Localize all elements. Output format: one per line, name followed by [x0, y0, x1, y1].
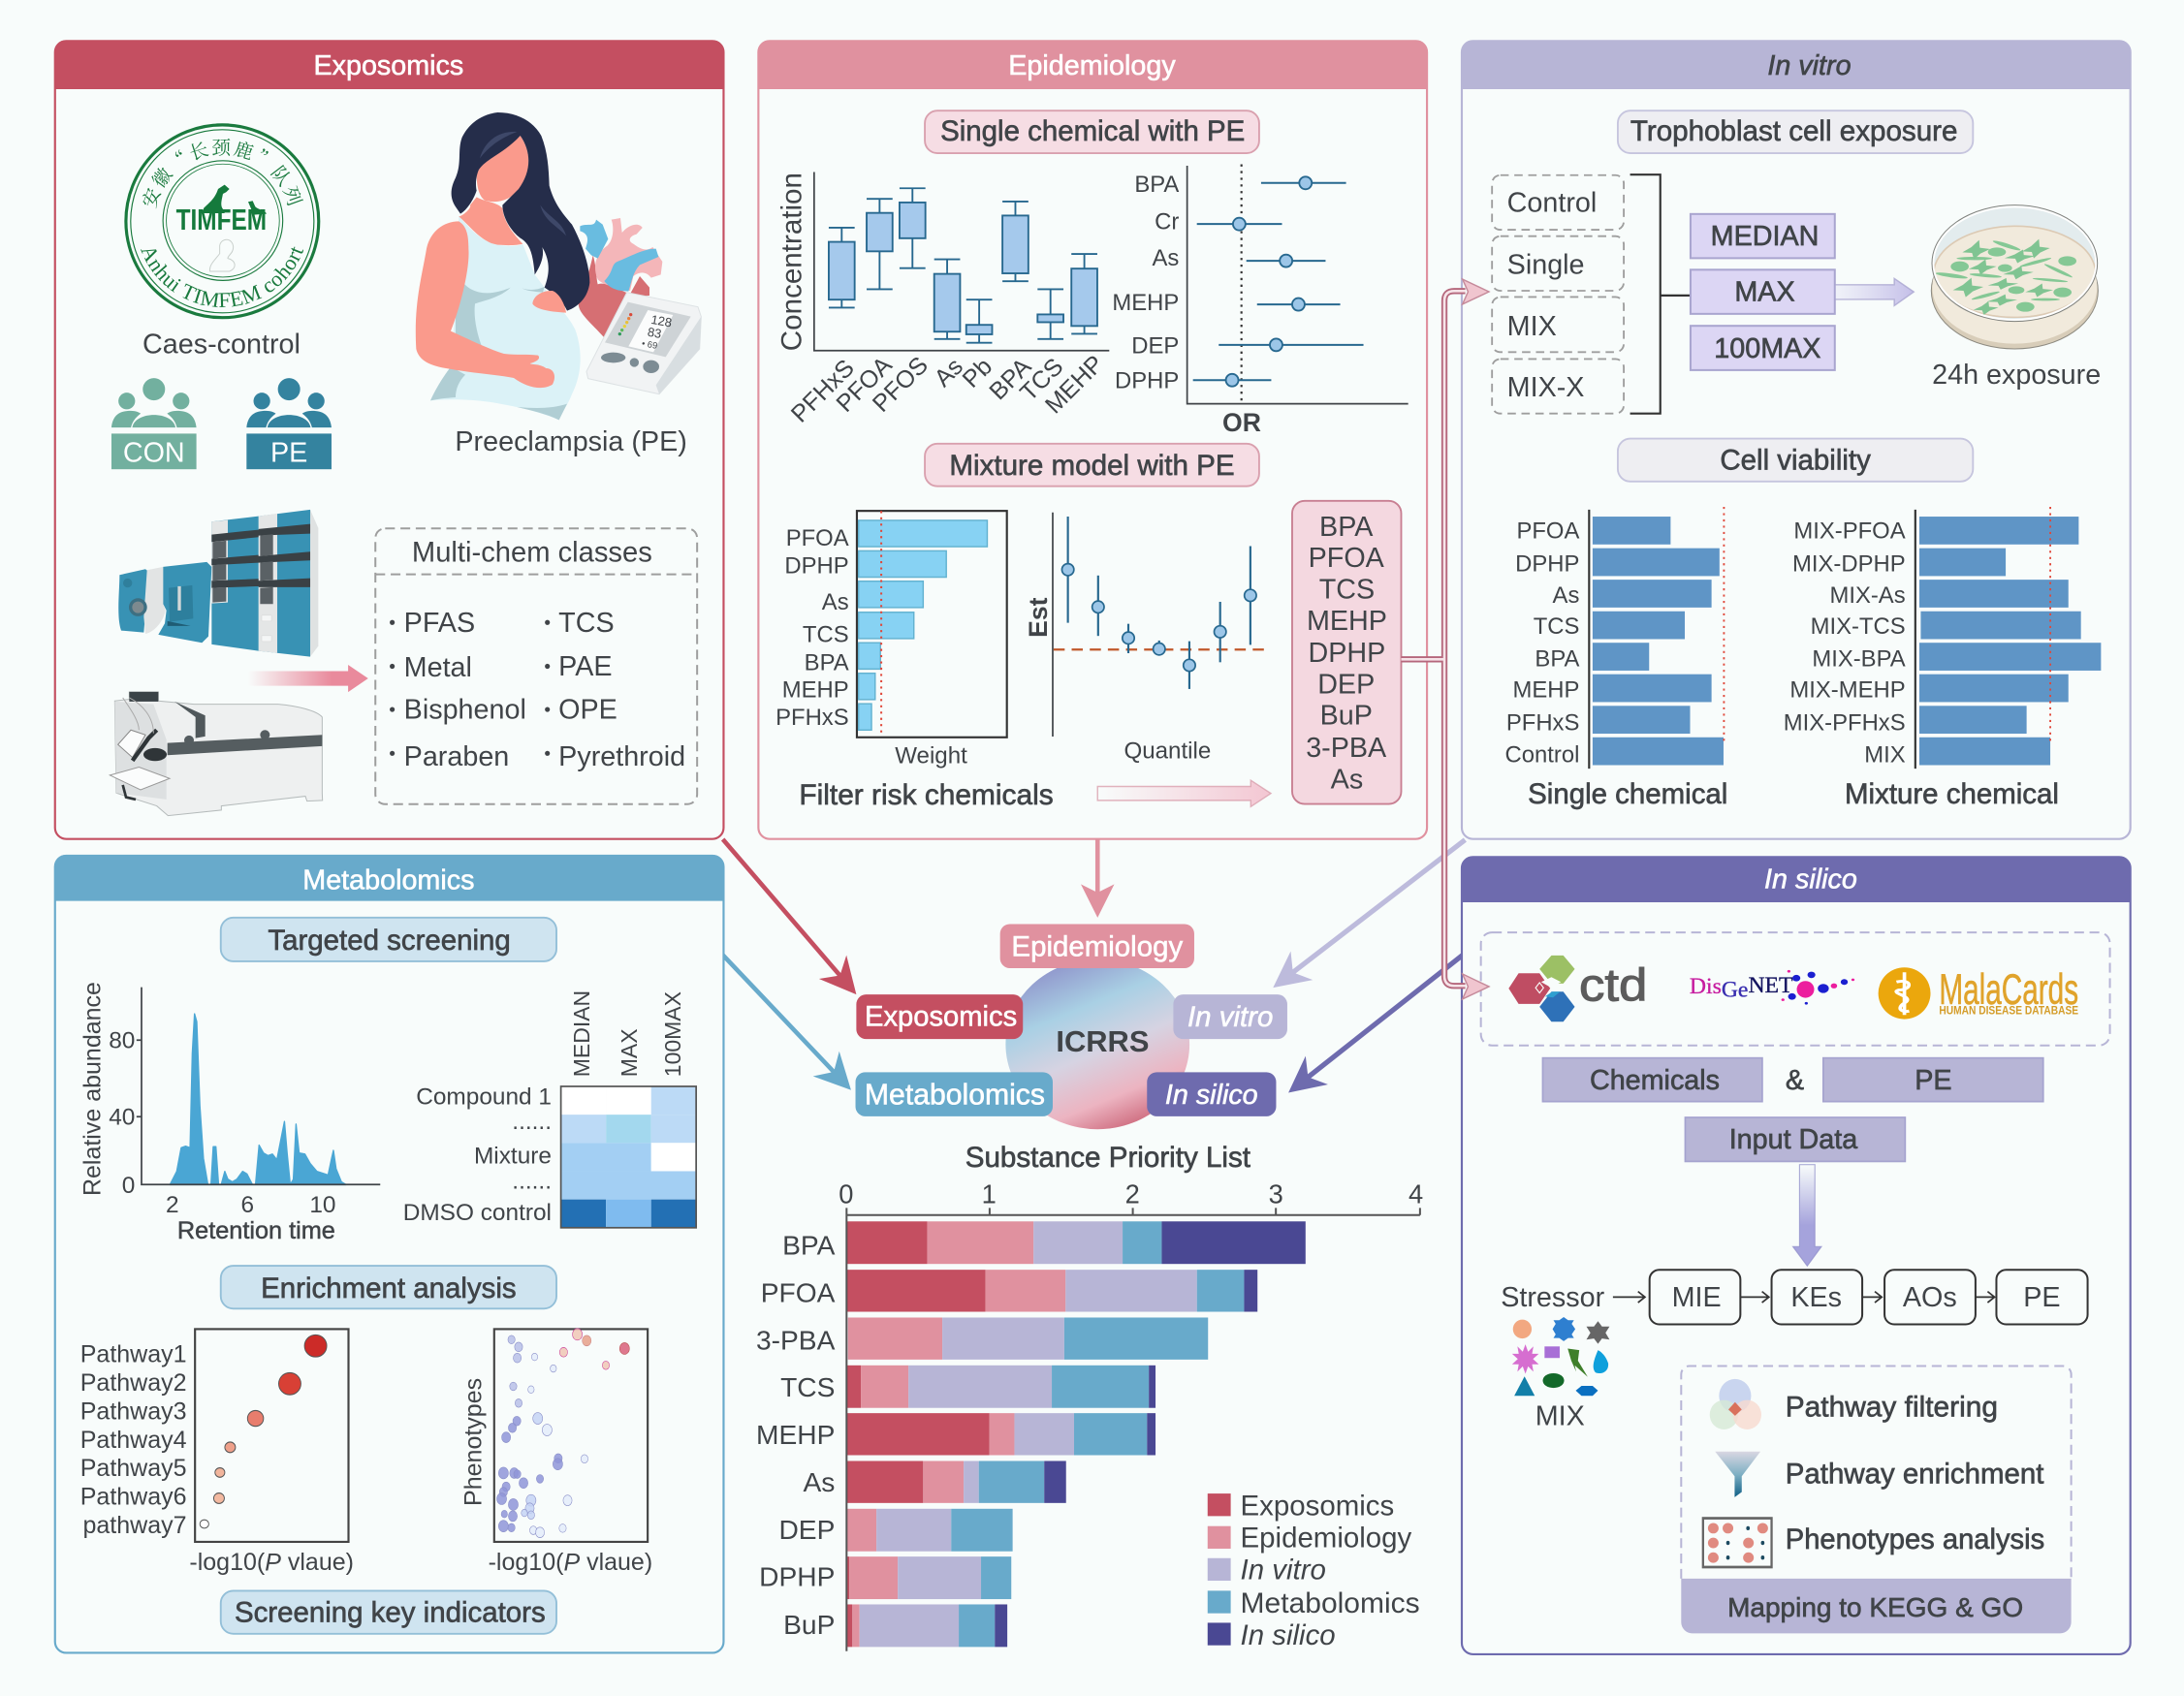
chart: mixture viability: MIX	[1864, 741, 1906, 768]
legend: In vitro	[1241, 1554, 1326, 1586]
chart: odds ratio forest plot: As	[1152, 245, 1179, 271]
chart: single chemical viability: As	[1553, 582, 1579, 609]
logo: TIMFEM cohort seal: TIMFEM	[176, 204, 267, 236]
logo: MalaCards: MalaCards	[1939, 966, 2078, 1014]
logo: TIMFEM cohort seal	[124, 123, 320, 320]
chart: mixture viability: MIX-PFOA	[1793, 518, 1906, 545]
label: filter risk chemicals: Filter risk chemicals	[799, 779, 1054, 811]
chart: mixture viability: MIX-BPA	[1812, 646, 1906, 673]
chart: chromatogram: 10	[309, 1192, 335, 1218]
boxes: doses: 100MAX	[1714, 333, 1820, 364]
logo: ctd	[1508, 956, 1647, 1021]
chart: quantile estimates	[1024, 513, 1267, 765]
chart: concentration box plot: TCS	[1015, 353, 1068, 406]
label: pathway filtering: Pathway filtering	[1786, 1391, 1998, 1423]
illustration: pregnant woman with heart and monitor: 83	[647, 325, 663, 341]
box: PE	[1823, 1058, 2043, 1102]
chart: single chemical viability	[1505, 507, 1724, 769]
chart: pathway bubbles: pathway7	[83, 1512, 187, 1539]
label: case-control: Caes-control	[142, 330, 301, 361]
arrow: filter to risk list	[1097, 780, 1271, 806]
box: risk chemicals list: BuP	[1320, 701, 1373, 732]
chart: substance priority list: PFOA	[761, 1278, 836, 1308]
pathway chain: PE	[2023, 1282, 2061, 1313]
box: databases	[1481, 932, 2110, 1046]
box: risk chemicals list: DPHP	[1309, 638, 1385, 669]
pill: trophoblast exposure: Trophoblast cell exposure	[1630, 115, 1957, 147]
pill: cell viability	[1618, 439, 1973, 482]
box: risk chemicals list: MEHP	[1307, 606, 1387, 637]
chart: mixture weights: PFOA	[786, 525, 849, 551]
face	[477, 136, 528, 202]
arrow: to petri dish	[1835, 278, 1914, 305]
pill: trophoblast exposure	[1618, 110, 1973, 153]
chart: mixture weights: DPHP	[784, 553, 849, 580]
box: risk chemicals list: As	[1331, 764, 1363, 795]
logo: DisGeNET	[1690, 970, 1854, 1005]
pathway chain: AOs	[1903, 1282, 1957, 1313]
chart: substance priority list: DEP	[778, 1515, 835, 1545]
chart: mixture weights: As	[822, 589, 849, 615]
chart: heatmap: MEDIAN	[569, 990, 594, 1077]
chart: pathway bubbles: Pathway4	[80, 1427, 187, 1454]
chart: heatmap: ......	[512, 1169, 552, 1195]
logo: MalaCards: HUMAN DISEASE DATABASE	[1939, 1004, 2078, 1018]
chart: pathway bubbles: Pathway2	[80, 1369, 187, 1397]
chart: substance priority list: MEHP	[756, 1420, 835, 1450]
box: risk chemicals list: DEP	[1317, 670, 1375, 701]
tag: epidemiology: Epidemiology	[1011, 930, 1183, 962]
chart: concentration box plot: As	[929, 353, 968, 393]
dress	[430, 216, 581, 420]
tag: exposomics	[856, 994, 1023, 1039]
chart: mixture weights: TCS	[803, 622, 849, 648]
label: preeclampsia: Preeclampsia (PE)	[455, 426, 687, 457]
connector: risk chemicals to in vitro and in silico	[1401, 279, 1489, 999]
panel: exposomics	[54, 40, 725, 866]
chart: pathway bubbles: Pathway5	[80, 1455, 187, 1482]
chart: mixture viability	[1784, 507, 2101, 769]
box: multi-chem classes: Metal	[404, 652, 472, 683]
pill: screening key indicators	[221, 1590, 556, 1634]
chart: mixture weights	[775, 511, 1007, 769]
chart: pathway bubbles: -log10(P vlaue)	[189, 1549, 354, 1576]
hand	[532, 291, 566, 313]
arrow: in silico to ICRRS	[1278, 940, 1474, 1107]
label: 24h exposure: 24h exposure	[1932, 360, 2101, 391]
chart: mixture viability: MIX-As	[1829, 582, 1906, 609]
chart: single chemical viability: TCS	[1534, 613, 1579, 640]
chart: substance priority list: 3	[1269, 1179, 1283, 1209]
icon: control group: CON	[123, 438, 185, 469]
groups: exposure conditions: Single	[1507, 250, 1585, 281]
chart: odds ratio forest plot: DPHP	[1115, 367, 1179, 393]
logo: DisGeNET: Ge	[1722, 977, 1748, 1002]
bracket	[1630, 174, 1691, 414]
chart: heatmap: Mixture	[474, 1144, 552, 1170]
logo: DisGeNET: Dis	[1690, 974, 1722, 999]
diagram: ICRRS hub: ICRRS	[1056, 1024, 1149, 1058]
icon: funnel	[1715, 1452, 1760, 1497]
legend: Epidemiology	[1241, 1522, 1412, 1554]
box: pathway analyses	[1681, 1366, 2072, 1633]
box: multi-chem classes: PAE	[558, 651, 613, 682]
pathway chain: MIE	[1672, 1282, 1722, 1313]
boxes: doses: MAX	[1734, 277, 1795, 308]
chart: mixture weights: MEHP	[782, 676, 849, 703]
tag: epidemiology	[1000, 924, 1194, 968]
box: multi-chem classes	[375, 528, 697, 804]
chart: pathway bubbles: Pathway6	[80, 1484, 187, 1511]
box: multi-chem classes: PFAS	[404, 608, 475, 639]
boxes: doses: MEDIAN	[1711, 221, 1819, 252]
box: multi-chem classes: Bisphenol	[404, 695, 526, 726]
chart: concentration box plot: Concentration	[775, 173, 807, 351]
illustration: ICP-MS instrument	[110, 692, 323, 816]
box: risk chemicals list: TCS	[1319, 574, 1375, 605]
chart: chromatogram: 40	[109, 1105, 135, 1131]
chart: chromatogram: Retention time	[177, 1217, 335, 1244]
pill: cell viability: Cell viability	[1720, 444, 1871, 476]
chart: concentration box plot: MEHP	[1040, 350, 1109, 419]
chart: substance priority list: TCS	[780, 1372, 835, 1402]
chart: chromatogram	[79, 982, 380, 1244]
chart: substance priority list	[756, 1142, 1423, 1651]
chart: chromatogram: 2	[166, 1192, 179, 1218]
chart: substance priority list: 1	[982, 1179, 997, 1209]
arrow: metabolomics to ICRRS	[710, 942, 864, 1103]
chart: odds ratio forest plot	[1112, 165, 1409, 437]
pill: targeted screening: Targeted screening	[268, 925, 511, 957]
chart: single chemical viability: MEHP	[1513, 677, 1579, 704]
chart: odds ratio forest plot: Cr	[1155, 209, 1179, 236]
groups: exposure conditions: Control	[1507, 188, 1597, 219]
icons: stressor mixture	[1512, 1317, 1609, 1396]
chart: mixture viability: MIX-MEHP	[1789, 677, 1906, 704]
chart: concentration box plot: PFHxS	[786, 355, 860, 428]
icon: PE group	[246, 378, 332, 469]
box: multi-chem classes: TCS	[558, 608, 615, 639]
chart: substance priority list: 4	[1409, 1179, 1423, 1209]
chart: odds ratio forest plot: MEHP	[1112, 290, 1179, 316]
box: input data	[1685, 1117, 1905, 1161]
chart: quantile estimates: Quantile	[1124, 738, 1211, 765]
tag: metabolomics: Metabolomics	[865, 1080, 1045, 1112]
heading: exposomics: Exposomics	[313, 50, 463, 81]
chart: pathway bubbles: Pathway3	[80, 1398, 187, 1426]
chart: pathway bubbles	[80, 1329, 354, 1576]
tag: in silico	[1147, 1072, 1276, 1116]
logo: TIMFEM cohort seal: 安徽“长颈鹿”队列	[142, 138, 303, 209]
chart: odds ratio forest plot: OR	[1222, 408, 1261, 437]
panel: in vitro	[1461, 41, 2131, 839]
chart: substance priority list: 3-PBA	[756, 1325, 836, 1355]
icon: PE group: PE	[270, 438, 307, 469]
tag: exposomics: Exposomics	[865, 1002, 1017, 1033]
chart: phenotype bubbles	[459, 1329, 652, 1576]
arrow: exposomics to ICRRS	[709, 828, 870, 1006]
pill: enrichment analysis	[221, 1266, 556, 1308]
chart: mixture viability: MIX-TCS	[1811, 613, 1906, 640]
chart: mixture viability: MIX-PFHxS	[1784, 709, 1906, 736]
logo: MalaCards	[1879, 966, 2078, 1020]
chart: chromatogram: 0	[122, 1173, 135, 1199]
legend: In silico	[1241, 1619, 1336, 1651]
pathway chain	[1501, 1270, 2088, 1325]
chart: phenotype bubbles: -log10(P vlaue)	[489, 1549, 652, 1576]
neck	[459, 197, 522, 245]
tag: in vitro: In vitro	[1187, 1001, 1273, 1033]
heading: in vitro: In vitro	[1767, 50, 1852, 81]
label: mixture chemical: Mixture chemical	[1845, 778, 2059, 810]
box: PE: PE	[1915, 1065, 1952, 1096]
groups: exposure conditions: MIX-X	[1507, 372, 1584, 403]
arrow: epidemiology to ICRRS	[1081, 839, 1114, 918]
icon: venn	[1710, 1379, 1761, 1429]
illustration: pregnant woman with heart and monitor	[416, 112, 701, 420]
tag: in silico: In silico	[1165, 1080, 1258, 1111]
chart: substance priority list: BuP	[783, 1610, 835, 1640]
chart: heatmap: Compound 1	[416, 1084, 552, 1111]
panel: epidemiology	[758, 41, 1428, 839]
chart: substance priority list: As	[804, 1467, 835, 1497]
chart: concentration box plot: BPA	[984, 353, 1037, 405]
pill: single chemical	[925, 110, 1259, 153]
chart: odds ratio forest plot: BPA	[1134, 172, 1179, 198]
box: risk chemicals list	[1292, 501, 1401, 804]
box: pathway analyses: Mapping to KEGG & GO	[1727, 1592, 2023, 1622]
chart: single chemical viability: BPA	[1535, 646, 1579, 673]
logo: ctd: ctd	[1579, 960, 1647, 1012]
chart: chromatogram: 80	[109, 1027, 135, 1053]
legend: Exposomics	[1241, 1490, 1394, 1522]
chart: concentration box plot: Pb	[958, 353, 997, 393]
box: multi-chem classes: Pyrethroid	[558, 741, 685, 772]
chart: concentration box plot: PFOS	[868, 352, 934, 418]
box: multi-chem classes: OPE	[558, 695, 617, 726]
arrow: instruments to chemical classes	[248, 665, 368, 692]
chart: heatmap: DMSO control	[403, 1200, 552, 1226]
heading: metabolomics: Metabolomics	[302, 865, 474, 896]
icon: control group	[111, 378, 197, 469]
illustration: pregnant woman with heart and monitor: • 69	[641, 338, 658, 351]
pathway chain: KEs	[1790, 1282, 1842, 1313]
logo: TIMFEM cohort seal: Anhui TIMFEM cohort	[141, 246, 303, 308]
box: chemicals	[1542, 1058, 1762, 1102]
pill: mixture model: Mixture model with PE	[949, 450, 1235, 482]
chart: odds ratio forest plot: DEP	[1131, 333, 1179, 360]
arrow: input data to KEs	[1793, 1165, 1821, 1266]
groups: exposure conditions: MIX	[1507, 311, 1557, 342]
chart: phenotype bubbles: Phenotypes	[459, 1378, 487, 1506]
chart: chromatogram: Relative abundance	[79, 982, 107, 1196]
chart: mixture weights: BPA	[805, 649, 849, 675]
chart: single chemical viability: DPHP	[1515, 551, 1579, 578]
heart	[579, 218, 662, 337]
panel: in silico	[1461, 857, 2131, 1654]
chart: mixture weights: Weight	[895, 742, 967, 769]
chart: substance priority list: DPHP	[759, 1562, 835, 1592]
pill: enrichment analysis: Enrichment analysis	[261, 1272, 517, 1304]
tag: in vitro	[1173, 994, 1287, 1039]
chart: substance priority list: BPA	[782, 1231, 836, 1261]
tag: metabolomics	[856, 1072, 1053, 1116]
heading: in silico: In silico	[1764, 864, 1857, 895]
icon: phenotype grid	[1703, 1519, 1772, 1567]
chart: quantile estimates: Est	[1024, 597, 1053, 638]
box: risk chemicals list: PFOA	[1309, 543, 1385, 574]
legend: Metabolomics	[1241, 1587, 1420, 1619]
panel: metabolomics	[54, 855, 724, 1652]
pathway chain: Stressor	[1501, 1282, 1605, 1313]
chart: heatmap	[403, 990, 696, 1228]
chart: heatmap: MAX	[617, 1028, 642, 1077]
pill: single chemical: Single chemical with PE	[940, 115, 1245, 147]
heading: substance priority list: Substance Priority List	[965, 1142, 1250, 1174]
illustration: LC-MS instrument	[118, 510, 318, 657]
chart: mixture weights: PFHxS	[775, 705, 849, 731]
arrow: in vitro to ICRRS	[1262, 826, 1476, 1002]
arm	[416, 221, 554, 388]
label: ampersand: &	[1786, 1065, 1804, 1096]
box: input data: Input Data	[1729, 1124, 1857, 1155]
box: multi-chem classes: Paraben	[404, 741, 509, 772]
chart: heatmap: 100MAX	[660, 991, 685, 1077]
chart: single chemical viability: PFHxS	[1506, 709, 1579, 736]
box: risk chemicals list: BPA	[1319, 512, 1374, 543]
hair	[452, 112, 589, 311]
chart: substance priority list: 2	[1125, 1179, 1140, 1209]
label: phenotypes analysis: Phenotypes analysis	[1786, 1524, 2044, 1555]
chart: concentration box plot: PFOA	[831, 352, 898, 418]
pill: mixture model	[925, 444, 1259, 487]
chart: single chemical viability: PFOA	[1516, 518, 1579, 545]
box: risk chemicals list: 3-PBA	[1306, 733, 1387, 764]
box: multi-chem classes: Multi-chem classes	[412, 537, 652, 568]
label: pathway enrichment: Pathway enrichment	[1786, 1458, 2043, 1490]
chart: heatmap: ......	[512, 1109, 552, 1135]
chart: single chemical viability: Control	[1505, 741, 1579, 768]
illustration: pregnant woman with heart and monitor: 128	[649, 312, 673, 330]
chart: chromatogram: 6	[241, 1192, 254, 1218]
groups: exposure conditions	[1492, 175, 1624, 414]
heading: epidemiology: Epidemiology	[1008, 50, 1176, 81]
chart: substance priority list: 0	[839, 1179, 853, 1209]
chart: pathway bubbles: Pathway1	[80, 1341, 187, 1368]
diagram: ICRRS hub	[856, 924, 1287, 1129]
pill: targeted screening	[221, 918, 556, 961]
monitor	[586, 293, 701, 394]
legend	[1208, 1490, 1420, 1651]
box: chemicals: Chemicals	[1590, 1065, 1720, 1096]
label: MIX: MIX	[1535, 1401, 1585, 1432]
chart: concentration box plot	[775, 172, 1109, 428]
boxes: doses	[1691, 214, 1835, 370]
icon: petri dish	[1931, 205, 2098, 349]
chart: mixture viability: MIX-DPHP	[1792, 551, 1906, 578]
logo: DisGeNET: NET	[1748, 973, 1793, 998]
label: single chemical: Single chemical	[1528, 778, 1727, 810]
pill: screening key indicators: Screening key indicators	[235, 1596, 546, 1628]
